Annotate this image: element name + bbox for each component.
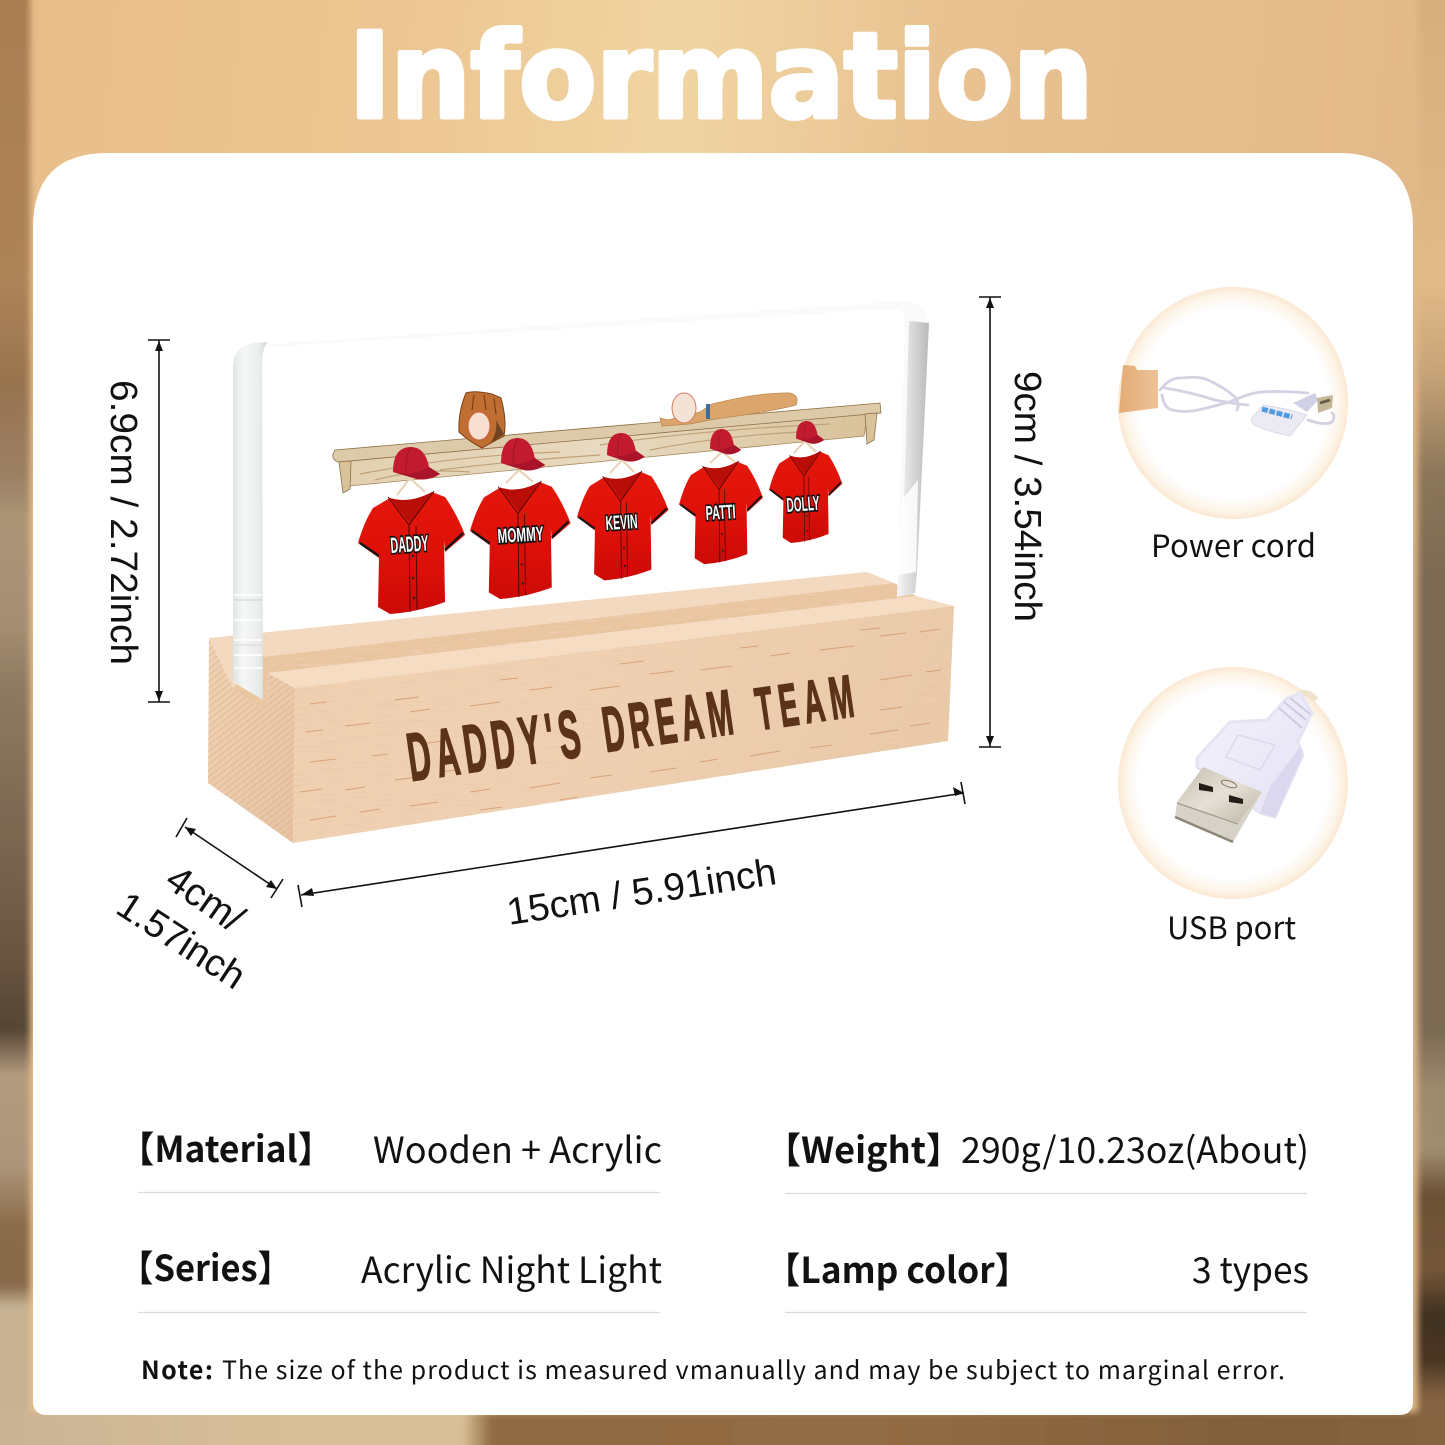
wooden base front rail top (268, 596, 954, 688)
spec: Series (119, 1240, 662, 1294)
jersey: DADDY: DADDY (390, 530, 429, 558)
dimension: length 15cm (298, 782, 965, 934)
jersey: MOMMY: MOMMY (497, 523, 545, 548)
jersey: DADDY (358, 491, 465, 614)
jersey: PATTI (679, 461, 763, 564)
jersey: KEVIN (577, 471, 668, 580)
spec: Lamp color: 3 types (1192, 1242, 1309, 1294)
label: Power cord (1151, 521, 1316, 566)
engraved text (402, 663, 858, 796)
panel: USB port (1118, 667, 1348, 948)
note: Note: (141, 1351, 213, 1387)
spec: Lamp color (765, 1242, 1309, 1294)
photo: wood block and cable (1119, 365, 1334, 436)
dimension: depth 4cm: 1.57inch (109, 884, 253, 998)
spec: Weight (765, 1122, 1309, 1174)
icon: baseball glove (459, 392, 505, 448)
engraved text: TEAM (751, 663, 858, 743)
spec: Lamp color: 【Lamp color】 (765, 1242, 1030, 1294)
title: Information (349, 7, 1093, 145)
hangers (397, 441, 816, 495)
note: The size of the product is measured vmanually and may be subject to marginal error. (222, 1351, 1285, 1387)
spec: Series: Acrylic Night Light (361, 1242, 662, 1294)
dimension: height 9cm: 9cm / 3.54inch (1006, 371, 1048, 622)
spec: Material: 【Material】 (119, 1121, 333, 1173)
dimension: depth 4cm: 4cm/ (158, 857, 252, 941)
spec: Weight: 【Weight】 (765, 1122, 962, 1174)
dimension: height 9cm (979, 297, 1048, 747)
engraved text: DADDY'S (402, 697, 585, 796)
panel: power cord (1118, 287, 1348, 566)
label: USB port (1167, 903, 1296, 948)
spec: Material: Wooden + Acrylic (373, 1122, 662, 1174)
dimension: height 6.9cm (102, 340, 170, 702)
wooden base front face (293, 606, 954, 843)
wooden base left side (208, 638, 295, 843)
circle (1118, 667, 1348, 899)
spec: Weight: 290g/10.23oz(About) (961, 1122, 1309, 1174)
icon: bat and ball (660, 393, 797, 426)
jersey: MOMMY (470, 481, 571, 599)
jersey: DOLLY: DOLLY (786, 493, 821, 517)
caps (393, 421, 824, 479)
jersey: KEVIN: KEVIN (605, 511, 638, 535)
jersey: DOLLY (769, 451, 842, 543)
circle (1118, 287, 1348, 519)
acrylic panel (233, 301, 929, 700)
photo: USB plug (1175, 693, 1316, 842)
artwork: shelf with caps and jerseys (333, 392, 881, 614)
dimension: depth 4cm (109, 818, 283, 998)
wooden base back rail top (209, 572, 894, 688)
engraved text: DREAM (598, 676, 737, 766)
wooden base slot wall (233, 583, 916, 712)
spec: Series: 【Series】 (119, 1240, 292, 1292)
wood grain dashes (300, 628, 941, 820)
spec: Material (119, 1121, 662, 1174)
shelf (333, 403, 881, 493)
jersey: PATTI: PATTI (705, 501, 736, 525)
product: acrylic night light on wooden base (208, 301, 954, 843)
dimension: length 15cm: 15cm / 5.91inch (504, 851, 779, 934)
dimension: height 6.9cm: 6.9cm / 2.72inch (102, 380, 144, 665)
